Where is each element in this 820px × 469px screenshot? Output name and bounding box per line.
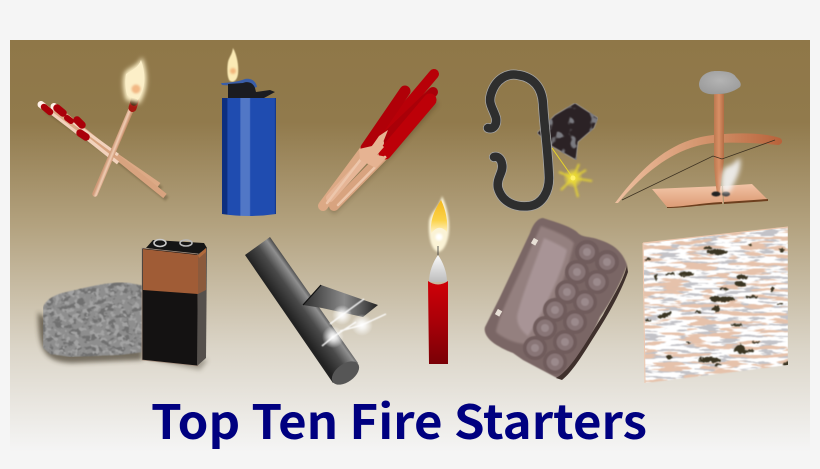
icon: steel wool bbox=[38, 282, 145, 363]
lighter flame bbox=[227, 48, 238, 82]
icon: ferro rod and striker bbox=[245, 237, 386, 389]
icon: match flame bbox=[123, 57, 147, 104]
bow bbox=[615, 133, 782, 203]
sparks bbox=[322, 299, 386, 348]
icon: egg carton bbox=[485, 218, 628, 380]
icon: 9V battery bbox=[142, 240, 208, 370]
striker steel bbox=[488, 75, 549, 206]
icon: bow drill bbox=[615, 71, 782, 208]
egg cups bbox=[523, 240, 619, 374]
title: Top Ten Fire Starters bbox=[151, 384, 647, 453]
candle flame bbox=[429, 196, 449, 260]
icon: birch bark bbox=[643, 227, 789, 383]
spindle bbox=[714, 94, 724, 194]
smoke bbox=[721, 158, 740, 192]
spark bbox=[552, 148, 592, 197]
icon: red-tipped sticks bbox=[323, 74, 434, 210]
icon: flint and steel bbox=[488, 75, 598, 206]
icon: lighter bbox=[221, 48, 276, 216]
stone bbox=[699, 71, 741, 94]
icon: candle bbox=[428, 196, 449, 364]
flint bbox=[537, 103, 598, 160]
icon: matches bbox=[41, 57, 167, 199]
fireboard bbox=[652, 186, 723, 207]
striker blade bbox=[303, 285, 378, 317]
